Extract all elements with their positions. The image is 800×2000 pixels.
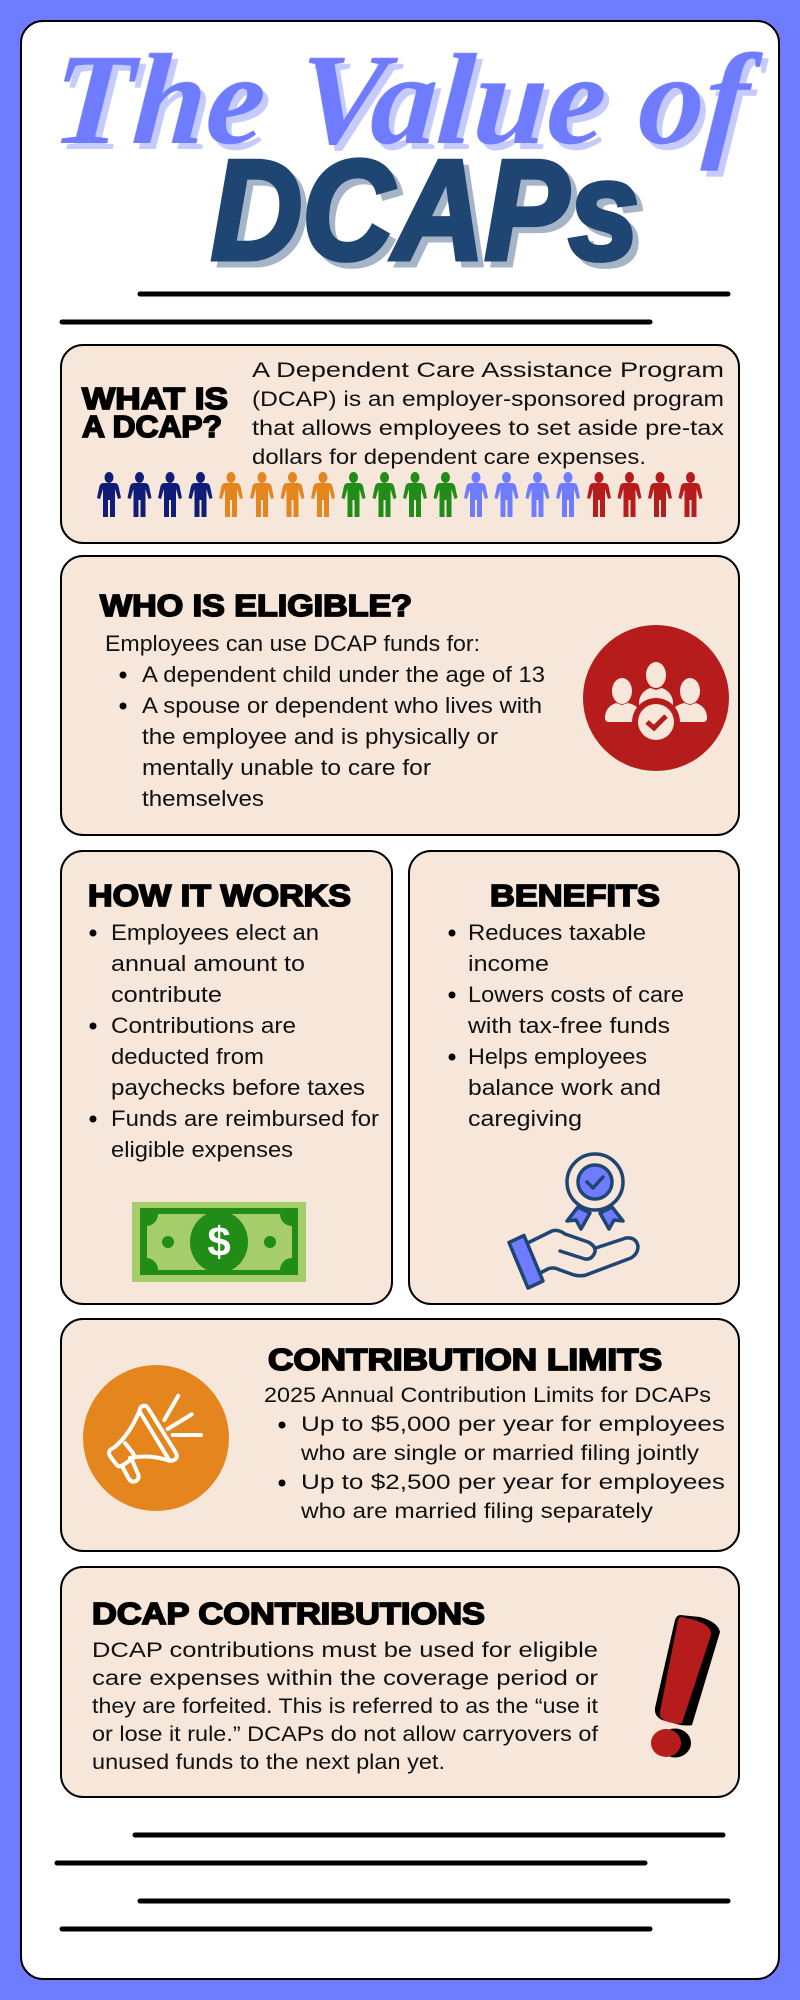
text: use it or lose it: care expenses within the coverage period or [92,1667,598,1690]
text: benefits list: income [468,951,549,976]
text: how it works list: Funds are reimbursed for [111,1106,379,1131]
panel: benefits [409,851,739,1304]
text: benefits list [448,920,684,1131]
text: eligibility list: A dependent child under the age of 13 [142,662,545,687]
heading: what is a DCAP: WHAT IS [82,382,228,416]
title: The Value of: The Value of [48,28,766,172]
text: limits list: Up to $2,500 per year for employees [301,1471,725,1494]
text: use it or lose it: they are forfeited. This is referred to as the “use it [92,1695,598,1718]
text: limits list: Up to $5,000 per year for employees [301,1413,725,1436]
text: definition: that allows employees to set aside pre-tax [252,417,725,440]
icon: exclamation mark [651,1615,720,1758]
panel: contribution limits [61,1319,739,1551]
text: definition: (DCAP) is an employer-sponsored program [252,388,724,411]
text: use it or lose it: or lose it rule.” DCAPs do not allow carryovers of [92,1723,598,1746]
heading: benefits: BENEFITS [490,879,660,913]
icon: group with check [583,625,729,771]
text: use it or lose it: unused funds to the next plan yet. [92,1751,445,1774]
text: eligibility list: Employees can use DCAP funds for: [105,631,480,656]
panel: how it works [61,851,392,1304]
top divider lines [62,294,728,322]
text: how it works list: contribute [111,982,222,1007]
text: definition [252,359,725,469]
heading: what is a DCAP: A DCAP? [82,410,222,444]
text: benefits list: balance work and [468,1075,661,1100]
text: eligibility list: mentally unable to care for [142,755,431,780]
panel: what is a DCAP [61,345,739,543]
text: limits list: who are married filing separately [300,1500,654,1523]
text: limits list: who are single or married filing jointly [300,1442,700,1465]
text: limits list [264,1384,725,1523]
text: how it works list: eligible expenses [111,1137,293,1162]
heading: contribution limits: CONTRIBUTION LIMITS [268,1343,662,1377]
text: definition: A Dependent Care Assistance Program [252,359,724,382]
icon: dollar bill: $ [207,1218,231,1265]
heading: DCAP contributions: DCAP CONTRIBUTIONS [92,1597,485,1631]
text: benefits list: Helps employees [468,1044,647,1069]
panel: DCAP contributions [61,1567,739,1797]
text: limits list: 2025 Annual Contribution Limits for DCAPs [264,1384,711,1407]
text: definition: dollars for dependent care expenses. [252,446,646,469]
text: how it works list: Contributions are [111,1013,296,1038]
text: how it works list: deducted from [111,1044,264,1069]
text: how it works list [90,920,379,1162]
title: DCAPs: DCAPs [211,131,639,290]
heading: how it works: HOW IT WORKS [88,879,351,913]
panel: who is eligible [61,556,739,835]
bottom divider lines [57,1835,728,1929]
text: eligibility list: themselves [142,786,264,811]
text: how it works list: Employees elect an [111,920,319,945]
heading: who is eligible: WHO IS ELIGIBLE? [100,589,412,623]
text: use it or lose it [92,1639,598,1774]
icon row: people [97,472,702,517]
heading: what is a DCAP [82,382,228,444]
text: eligibility list: the employee and is physically or [142,724,498,749]
icon: hand with award [509,1154,638,1288]
text: benefits list: Lowers costs of care [468,982,684,1007]
text: eligibility list: A spouse or dependent who lives with [142,693,542,718]
icon: dollar bill [132,1202,306,1282]
text: eligibility list [105,631,545,811]
text: use it or lose it: DCAP contributions must be used for eligible [92,1639,598,1662]
text: benefits list: Reduces taxable [468,920,646,945]
text: how it works list: annual amount to [111,951,305,976]
text: benefits list: caregiving [468,1106,582,1131]
icon: megaphone [83,1365,229,1511]
text: benefits list: with tax-free funds [467,1013,670,1038]
text: how it works list: paychecks before taxes [111,1075,365,1100]
